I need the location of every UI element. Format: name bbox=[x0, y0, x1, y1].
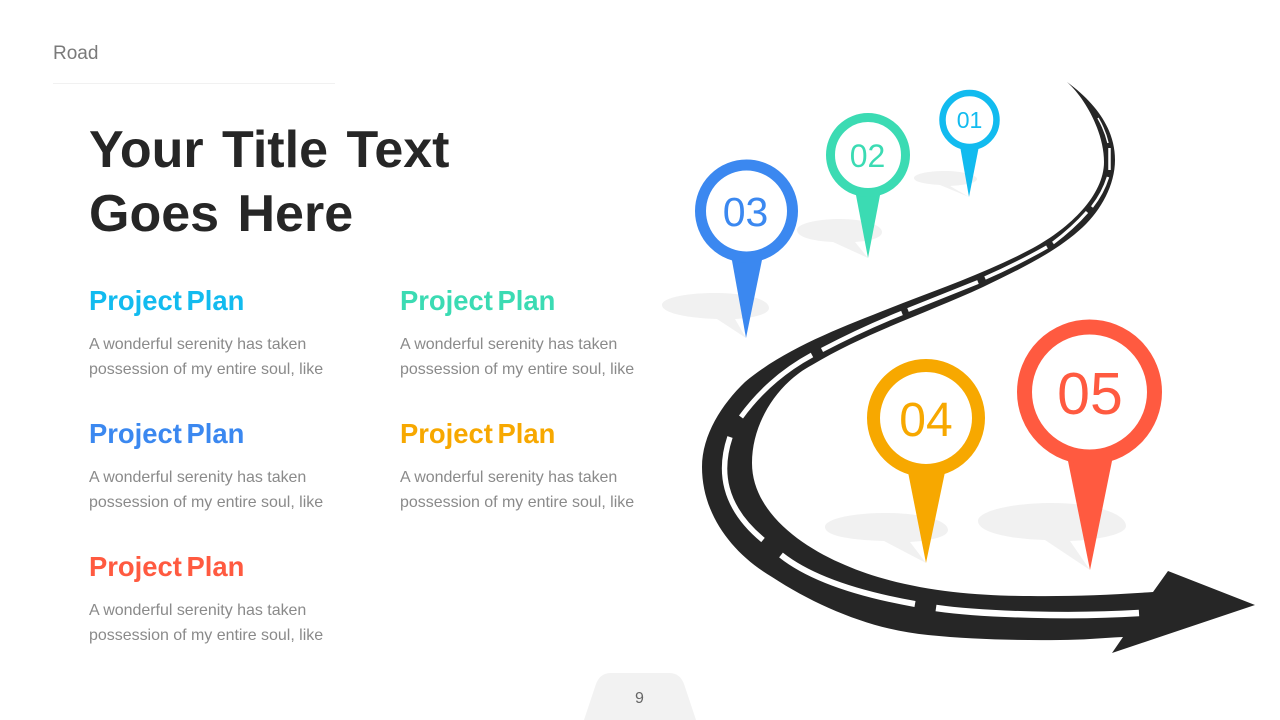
text block 1: possession of my entire soul, like bbox=[89, 361, 323, 378]
pin shadow 04 bbox=[825, 513, 948, 563]
pin 01: 01 bbox=[957, 107, 982, 133]
text block 3: Project Plan bbox=[89, 418, 244, 449]
text block 3: A wonderful serenity has taken bbox=[89, 469, 306, 486]
text block 2 bbox=[400, 285, 634, 378]
text block 3 bbox=[89, 418, 323, 511]
text block 5: A wonderful serenity has taken bbox=[89, 602, 306, 619]
pin 04 bbox=[874, 366, 978, 563]
text block 2: A wonderful serenity has taken bbox=[400, 336, 617, 353]
pin shadow 02 bbox=[797, 219, 882, 258]
text block 1: A wonderful serenity has taken bbox=[89, 336, 306, 353]
text block 2: Project Plan bbox=[400, 285, 555, 316]
text block 5: Project Plan bbox=[89, 551, 244, 582]
title: Goes Here bbox=[89, 185, 353, 243]
text block 4 bbox=[400, 418, 634, 511]
text block 2: possession of my entire soul, like bbox=[400, 361, 634, 378]
pin 04: 04 bbox=[899, 394, 953, 447]
text block 4: Project Plan bbox=[400, 418, 555, 449]
text block 5 bbox=[89, 551, 323, 644]
text block 5: possession of my entire soul, like bbox=[89, 627, 323, 644]
pin shadow 03 bbox=[662, 293, 769, 338]
pin shadow 05 bbox=[978, 503, 1126, 570]
pin 02 bbox=[830, 118, 906, 258]
page number tab: 9 bbox=[635, 690, 644, 707]
pin 03 bbox=[700, 165, 792, 338]
pin 03: 03 bbox=[723, 189, 768, 235]
page number tab bbox=[584, 673, 696, 720]
text block 1 bbox=[89, 285, 323, 378]
section label: Road bbox=[53, 43, 98, 64]
text block 4: possession of my entire soul, like bbox=[400, 494, 634, 511]
pin 05 bbox=[1024, 327, 1154, 570]
text block 4: A wonderful serenity has taken bbox=[400, 469, 617, 486]
pin 02: 02 bbox=[850, 138, 885, 174]
title: Your Title Text bbox=[89, 121, 450, 179]
pin 05: 05 bbox=[1057, 361, 1123, 427]
pin shadow 01 bbox=[914, 171, 977, 197]
title bbox=[89, 121, 450, 243]
road with arrow bbox=[702, 82, 1255, 653]
text block 1: Project Plan bbox=[89, 285, 244, 316]
pin 01 bbox=[942, 93, 996, 197]
text block 3: possession of my entire soul, like bbox=[89, 494, 323, 511]
